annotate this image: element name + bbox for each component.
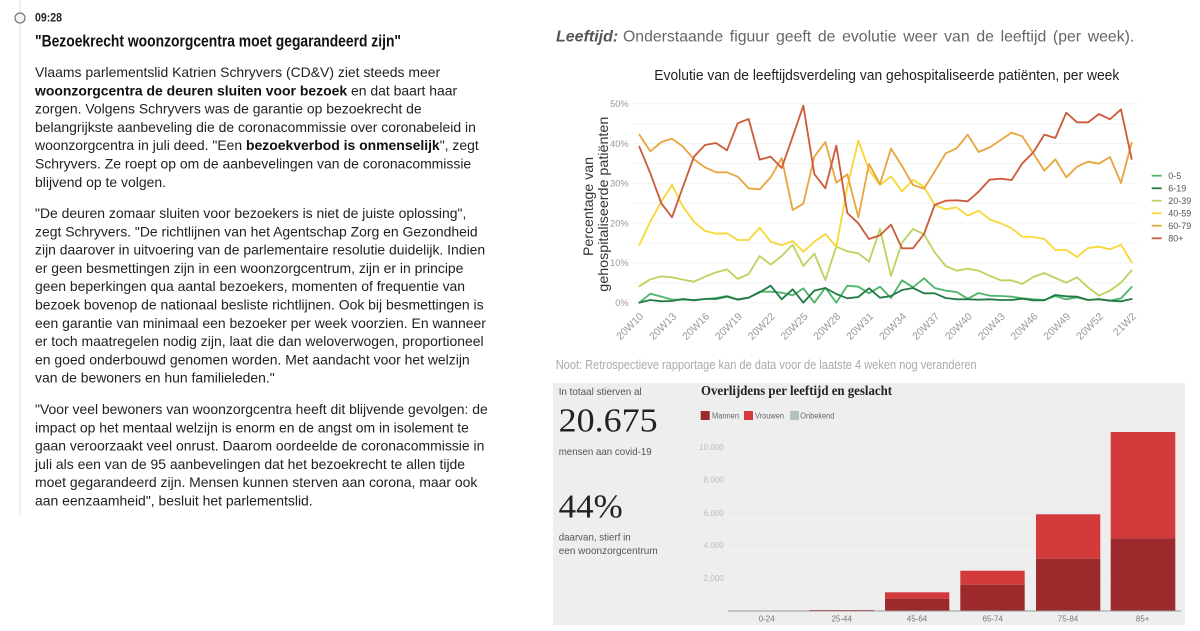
line: 20-39 xyxy=(639,229,1132,296)
paragraph 3: gaan veroorzaakt veel onrust. Daarom oordeelde de coronacommissie in xyxy=(35,438,484,454)
article heading: "Bezoekrecht woonzorgcentra moet gegarandeerd zijn" xyxy=(35,32,401,50)
paragraph 3: aan eenzaamheid", besluit het parlementslid. xyxy=(35,492,313,508)
age axis labels: 65-74 xyxy=(982,615,1003,624)
x axis labels: 20W37 xyxy=(910,311,942,343)
paragraph 1: zorgen. Volgens Schryvers was de garantie op bezoekrecht de xyxy=(35,101,422,117)
stat: share in care homes xyxy=(559,489,658,557)
age axis labels: 75-84 xyxy=(1058,615,1079,624)
x axis labels: 20W22 xyxy=(746,311,778,343)
line: 0-5 xyxy=(639,278,1132,303)
value axis labels: 2.000 xyxy=(704,574,724,583)
x axis labels: 20W10 xyxy=(614,311,646,343)
intro sentence: Leeftijd: Onderstaande figuur geeft de evolutie weer van de leeftijd (per week). xyxy=(623,29,1134,46)
legend: age groups: 6-19 xyxy=(1168,184,1186,194)
value axis labels xyxy=(699,443,724,583)
x axis labels: 20W46 xyxy=(1009,311,1041,343)
stat: share in care homes: een woonzorgcentrum xyxy=(559,545,658,557)
paragraph 1: Schryvers. Ze roept op om de aanbevelingen van de coronacommissie xyxy=(35,156,471,172)
data lines xyxy=(639,106,1132,303)
x axis labels: 20W52 xyxy=(1074,311,1106,343)
line: 6-19 xyxy=(639,286,1132,303)
paragraph 3: impact op het mentaal welzijn is enorm en de angst om in isolement te xyxy=(35,419,469,435)
timeline rail xyxy=(20,0,21,515)
stat: share in care homes: 44% xyxy=(559,489,623,526)
y axis labels: 30% xyxy=(610,179,628,189)
stat: total deaths: mensen aan covid-19 xyxy=(559,446,652,458)
bar: 65-74 xyxy=(960,571,1025,611)
legend: age groups: 40-59 xyxy=(1168,209,1191,219)
value axis labels: 4.000 xyxy=(704,541,724,550)
y axis title: Percentage van xyxy=(580,157,596,256)
bar chart legend: Onbekend xyxy=(800,411,834,420)
paragraph 2 xyxy=(35,205,486,386)
legend: age groups: 20-39 xyxy=(1168,196,1191,206)
timestamp: 09:28 xyxy=(35,13,63,25)
y axis labels: 0% xyxy=(615,298,628,308)
paragraph 3 xyxy=(34,401,488,508)
panel: news article xyxy=(15,0,488,515)
legend: age groups: 60-79 xyxy=(1168,221,1191,231)
y axis labels: 40% xyxy=(610,139,628,149)
paragraph 1: Vlaams parlementslid Katrien Schryvers (CD&V) ziet steeds meer xyxy=(35,64,440,80)
y axis labels: 10% xyxy=(610,258,628,268)
paragraph 2: en goed onderbouwd genomen worden. Met aandacht voor het welzijn xyxy=(35,351,470,367)
paragraph 3: "Voor veel bewoners van woonzorgcentra heeft dit blijvende gevolgen: de xyxy=(35,401,488,417)
line: 60-79 xyxy=(639,133,1132,217)
y axis labels: 20% xyxy=(610,218,628,228)
x axis labels: 20W13 xyxy=(647,311,679,343)
line: 40-59 xyxy=(639,141,1132,262)
paragraph 2: "De deuren zomaar sluiten voor bezoekers is niet de juiste oplossing", xyxy=(35,205,466,221)
paragraph 1: blijvend op te volgen. xyxy=(35,174,166,190)
x axis labels: 20W16 xyxy=(680,311,712,343)
age axis labels: 25-44 xyxy=(831,615,852,624)
legend: age groups: 0-5 xyxy=(1168,171,1181,181)
bar: 85+ xyxy=(1111,432,1175,611)
bar: 25-44 xyxy=(809,610,874,611)
intro sentence: Leeftijd: Leeftijd: xyxy=(556,29,618,46)
paragraph 2: bezoek bovenop de nationaal besliste richtlijnen. Ook bij besmettingen is xyxy=(35,296,484,312)
panel: mortality xyxy=(553,383,1185,625)
paragraph 1: woonzorgcentra de deuren sluiten voor bezoek en dat baart haar xyxy=(34,82,457,98)
legend: age groups: 80+ xyxy=(1168,234,1184,244)
x axis labels: 20W19 xyxy=(713,311,745,343)
paragraph 2: een garantie van minimaal een bezoeker per week voorzien. En wanneer xyxy=(35,315,486,331)
line: 80+ xyxy=(639,106,1132,248)
paragraph 3: juli als een van de 95 aanbevelingen dat het bezoekrecht te allen tijde xyxy=(34,456,465,472)
x axis labels: 21W2 xyxy=(1111,311,1139,339)
x axis labels: 20W31 xyxy=(844,311,876,343)
stat: total deaths: 20.675 xyxy=(559,403,658,440)
bar: 45-64 xyxy=(885,592,949,611)
bar chart legend xyxy=(701,411,834,420)
x axis labels xyxy=(614,311,1139,343)
paragraph 2: er geen besmettingen zijn in een woonzorgcentrum, zijn er in principe xyxy=(35,260,464,276)
value axis labels: 10.000 xyxy=(699,443,724,452)
paragraph 2: er toch maatregelen nodig zijn, laat die dan weloverwogen, proportioneel xyxy=(35,333,484,349)
paragraph 2: van de bewoners en hun familieleden." xyxy=(35,370,275,386)
paragraph 3: moet gegarandeerd zijn. Mensen kunnen sterven aan corona, maar ook xyxy=(35,474,477,490)
bar chart heading: Overlijdens per leeftijd en geslacht xyxy=(701,384,892,399)
y axis title: gehospitaliseerde patiënten xyxy=(595,117,611,292)
age axis labels: 45-64 xyxy=(907,615,928,624)
x axis labels: 20W49 xyxy=(1041,311,1073,343)
value axis labels: 8.000 xyxy=(704,476,724,484)
x axis labels: 20W25 xyxy=(779,311,811,343)
x axis labels: 20W43 xyxy=(976,311,1008,343)
chart title: leeftijdsverdeling: Evolutie van de leeftijdsverdeling van gehospitaliseerde patiënten, per week xyxy=(654,68,1120,84)
y axis title xyxy=(580,117,611,292)
stat: total deaths xyxy=(559,386,658,458)
note: Noot: Retrospectieve rapportage kan de data voor de laatste 4 weken nog veranderen xyxy=(556,358,977,372)
paragraph 1 xyxy=(34,64,479,190)
y axis labels xyxy=(610,99,628,308)
y axis labels: 50% xyxy=(610,99,628,109)
line chart: age distribution per week xyxy=(580,99,1191,343)
paragraph 2: zegt Schryvers. "De richtlijnen van het Agentschap Zorg en Gezondheid xyxy=(35,223,478,239)
value axis labels: 6.000 xyxy=(704,509,724,518)
bar: 75-84 xyxy=(1036,514,1100,611)
paragraph 2: zijn daarover in uitvoering van de parlementaire resolutie duidelijk. Indien xyxy=(35,242,485,258)
age axis labels: 0-24 xyxy=(759,615,775,624)
age axis labels xyxy=(759,615,1150,624)
age axis labels: 85+ xyxy=(1136,615,1150,624)
x axis labels: 20W34 xyxy=(877,311,909,343)
bar chart legend: Vrouwen xyxy=(755,411,784,420)
paragraph 1: woonzorgcentra in juli deed. "Een bezoekverbod is onmenselijk", zegt xyxy=(34,137,479,153)
x axis labels: 20W40 xyxy=(943,311,975,343)
stat: total deaths: In totaal stierven al xyxy=(559,386,642,398)
paragraph 1: belangrijkste aanbeveling die de coronacommissie over coronabeleid in xyxy=(35,119,476,135)
x axis labels: 20W28 xyxy=(811,311,843,343)
paragraph 2: geen beperkingen qua aantal bezoekers, momenten of frequentie van xyxy=(35,278,465,294)
icon: timeline marker xyxy=(15,13,25,23)
bar chart: deaths by age and sex xyxy=(699,432,1181,624)
legend: age groups xyxy=(1152,171,1191,244)
stat: share in care homes: daarvan, stierf in xyxy=(559,532,631,544)
bar chart legend: Mannen xyxy=(712,411,739,420)
